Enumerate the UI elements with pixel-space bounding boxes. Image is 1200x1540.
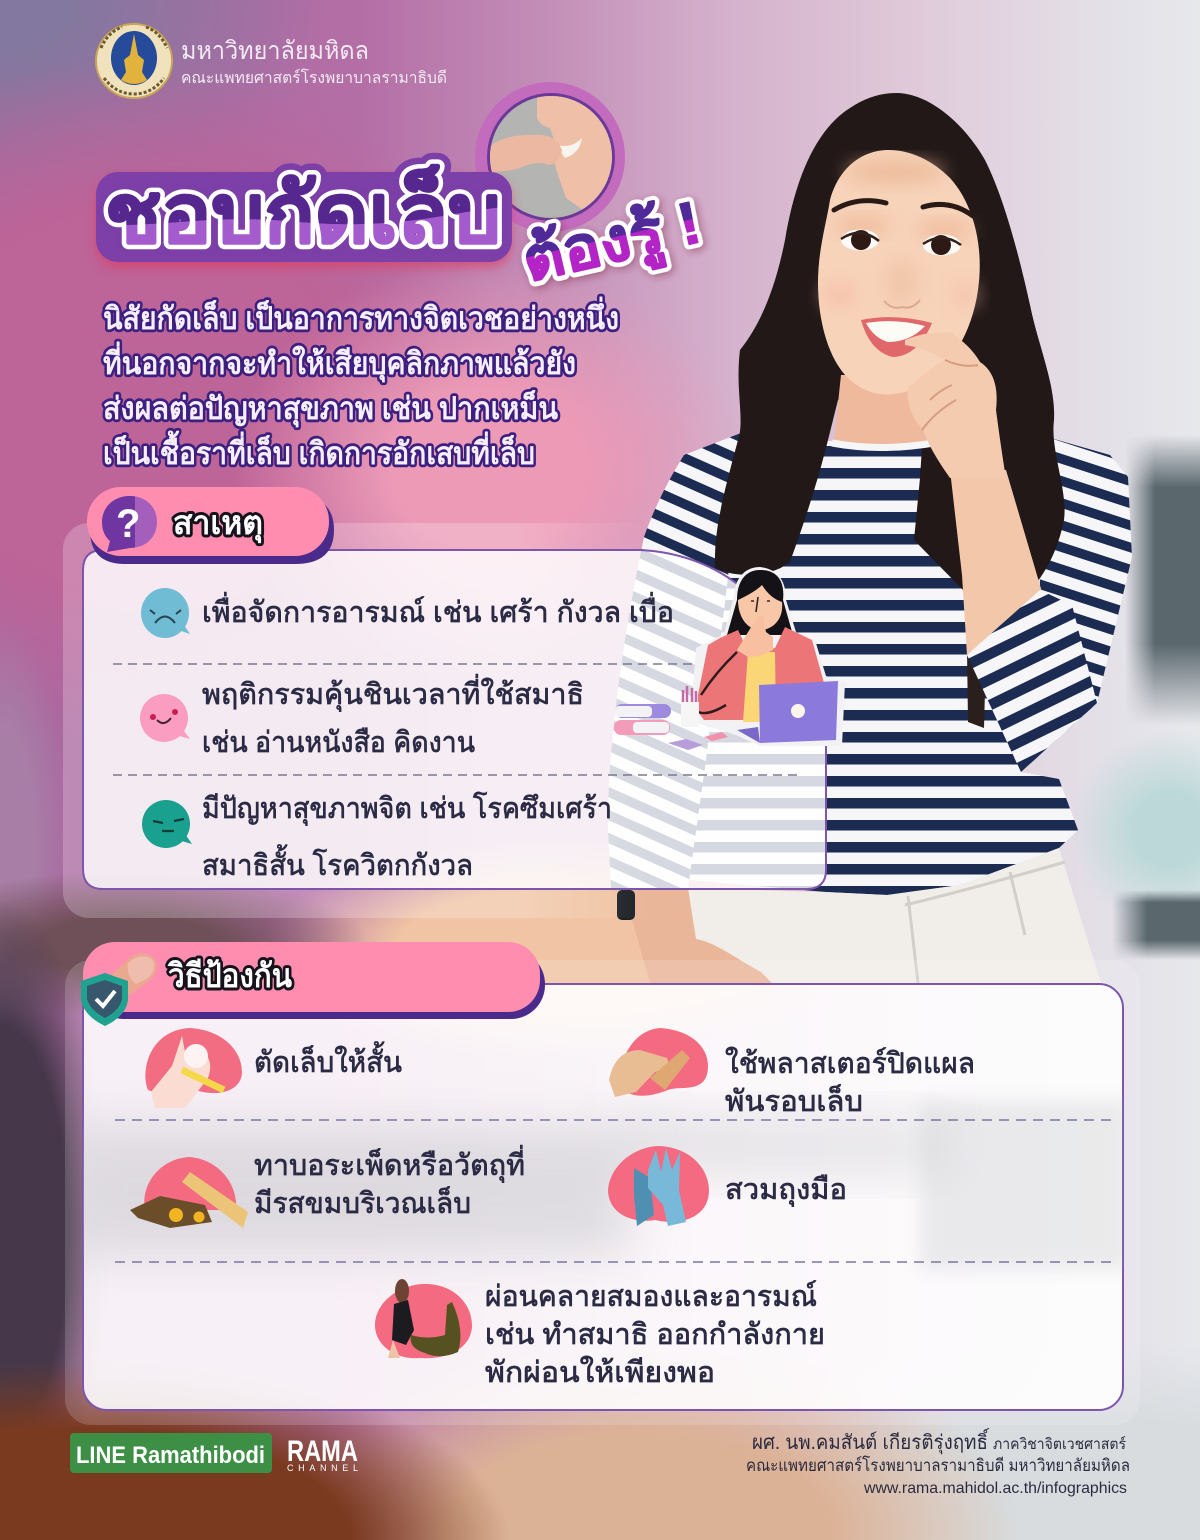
- logo: Mahidol University: [96, 24, 172, 98]
- prevention text 3: [254, 1145, 525, 1220]
- icon: gloves: [608, 1146, 709, 1226]
- cause text 1: เพื่อจัดการอารมณ์ เช่น เศร้า กังวล เบื่อ: [202, 592, 674, 629]
- cause text 3: สมาธิสั้น โรควิตกกังวล: [202, 844, 473, 882]
- author credit: ผศ. นพ.คมสันต์ เกียรติรุ่งฤทธิ์: [752, 1427, 990, 1455]
- right sleeve cuff: [967, 590, 1097, 772]
- prevention text 3: ทาบอระเพ็ดหรือวัตถุที่: [254, 1145, 525, 1183]
- facial features: [751, 597, 770, 612]
- cause text 3: [202, 791, 612, 882]
- icon: question bubble: ?: [116, 502, 140, 546]
- prevention text 2: ใช้พลาสเตอร์ปิดแผล: [725, 1046, 975, 1080]
- thumb hand: [737, 616, 773, 657]
- university name: มหาวิทยาลัยมหิดล: [181, 37, 369, 65]
- face: [818, 150, 980, 394]
- title: ชอบกัดเล็บ: ชอบกัดเล็บ: [105, 164, 501, 260]
- title: ชอบกัดเล็บ: ชอบกัดเล็บ: [105, 164, 501, 260]
- sticky notes: [668, 739, 703, 750]
- cause text 2: เช่น อ่านหนังสือ คิดงาน: [202, 727, 475, 759]
- logo: Rama Channel: RAMA: [287, 1435, 358, 1468]
- logo: Rama Channel: CHANNEL: [287, 1463, 358, 1473]
- icon: fingernail: [108, 953, 157, 995]
- laptop: [737, 681, 838, 743]
- hair sliver: [967, 650, 985, 728]
- icon: question bubble: [102, 496, 157, 552]
- prevention text 2: พันรอบเล็บ: [725, 1083, 863, 1118]
- neck: [834, 375, 933, 446]
- icon: shield check: [81, 973, 128, 1026]
- hair: [727, 570, 793, 635]
- icon: filing nails: [145, 1028, 242, 1108]
- eyebrows: [834, 201, 973, 216]
- tab: prevention heading: [81, 942, 545, 1026]
- photo: woman biting her nail: [608, 93, 1132, 983]
- photo circle: nail biting mouth: [475, 82, 625, 232]
- hand biting nail: [905, 332, 1006, 478]
- sleeve line: [698, 652, 737, 713]
- author credit: www.rama.mahidol.ac.th/infographics: [863, 1480, 1127, 1497]
- intro paragraph: ที่นอกจากจะทำให้เสียบุคลิกภาพแล้วยัง: [103, 341, 576, 383]
- mouth: [861, 317, 932, 357]
- face: [738, 585, 782, 630]
- faculty name: คณะแพทยศาสตร์โรงพยาบาลรามาธิบดี: [181, 68, 447, 87]
- illustration: thinking woman at laptop: [614, 567, 845, 750]
- panel: causes: [63, 523, 843, 918]
- intro paragraph: เป็นเชื้อราที่เล็บ เกิดการอักเสบที่เล็บ: [103, 430, 535, 471]
- cause text 3: มีปัญหาสุขภาพจิต เช่น โรคซึมเศร้า: [202, 791, 612, 826]
- hair: [715, 93, 1065, 600]
- nose: [884, 258, 920, 308]
- prevention text 5: ผ่อนคลายสมองและอารมณ์: [485, 1280, 817, 1313]
- prevention text 2: [725, 1046, 975, 1118]
- prevention text 5: เช่น ทำสมาธิ ออกกำลังกาย: [485, 1319, 825, 1351]
- title: ต้องรู้ !: ต้องรู้ !: [516, 188, 708, 298]
- prevention text 5: พักผ่อนให้เพียงพอ: [485, 1355, 715, 1389]
- sticker outline: [692, 567, 845, 746]
- torso shirt: [690, 433, 1078, 895]
- right sleeve upper: [967, 435, 1132, 772]
- intro paragraph: [103, 296, 619, 471]
- panel: prevention: [65, 960, 1140, 1425]
- emoji: neutral teal: [142, 800, 192, 848]
- badge: LINE Ramathibodi: [70, 1433, 272, 1473]
- icon: bandage: [609, 1028, 708, 1097]
- eyes: [841, 230, 961, 256]
- heading: สาเหตุ: สาเหตุ: [173, 504, 263, 544]
- cause text 2: พฤติกรรมคุ้นชินเวลาที่ใช้สมาธิ: [202, 674, 584, 712]
- collar: [832, 443, 934, 448]
- face shading: [822, 160, 979, 309]
- title: ชอบกัดเล็บ: ชอบกัดเล็บ: [105, 164, 501, 260]
- left sleeve: [608, 433, 741, 888]
- trouser seams: [905, 862, 1065, 983]
- cause divider: [113, 664, 800, 775]
- yellow top: [743, 652, 776, 722]
- intro paragraph: ส่งผลต่อปัญหาสุขภาพ เช่น ปากเหม็น: [103, 389, 558, 428]
- prevention text 1: ตัดเล็บให้สั้น: [254, 1041, 402, 1079]
- cause text 2: [202, 674, 584, 759]
- emoji: sad blue: [141, 588, 190, 638]
- icon: yoga: [375, 1279, 472, 1358]
- intro paragraph: นิสัยกัดเล็บ เป็นอาการทางจิตเวชอย่างหนึ่ง: [103, 296, 619, 336]
- pen cup: [681, 686, 699, 727]
- arm and hand at hip: [623, 888, 772, 983]
- prevention text 5: [485, 1280, 825, 1389]
- title: ชอบกัดเล็บ: ชอบกัดเล็บ: [105, 164, 501, 260]
- forearm: [950, 470, 1042, 655]
- heading: วิธีป้องกัน: วิธีป้องกัน: [168, 957, 292, 994]
- tab: causes heading: [87, 487, 334, 564]
- author credit: ภาควิชาจิตเวชศาสตร์: [993, 1436, 1126, 1453]
- books: [614, 704, 671, 735]
- badge: LINE Ramathibodi: LINE Ramathibodi: [76, 1442, 265, 1469]
- prevention dividers: [115, 1120, 1113, 1262]
- icon: bitter herb: [130, 1157, 248, 1228]
- white trousers: [640, 848, 1101, 983]
- sticky note pink: [704, 732, 728, 741]
- title: ต้องรู้ !: ต้องรู้ !: [516, 188, 708, 298]
- title: ต้องรู้ !: ต้องรู้ !: [516, 188, 708, 298]
- author credit: คณะแพทยศาสตร์โรงพยาบาลรามาธิบดี มหาวิทยาลัยมหิดล: [746, 1455, 1130, 1475]
- prevention text 3: มีรสขมบริเวณเล็บ: [254, 1185, 471, 1220]
- jacket: [698, 627, 828, 720]
- prevention text 4: สวมถุงมือ: [725, 1174, 847, 1207]
- author credit: [746, 1427, 1130, 1497]
- emoji: smiling pink: [140, 694, 190, 742]
- watch: [617, 890, 635, 920]
